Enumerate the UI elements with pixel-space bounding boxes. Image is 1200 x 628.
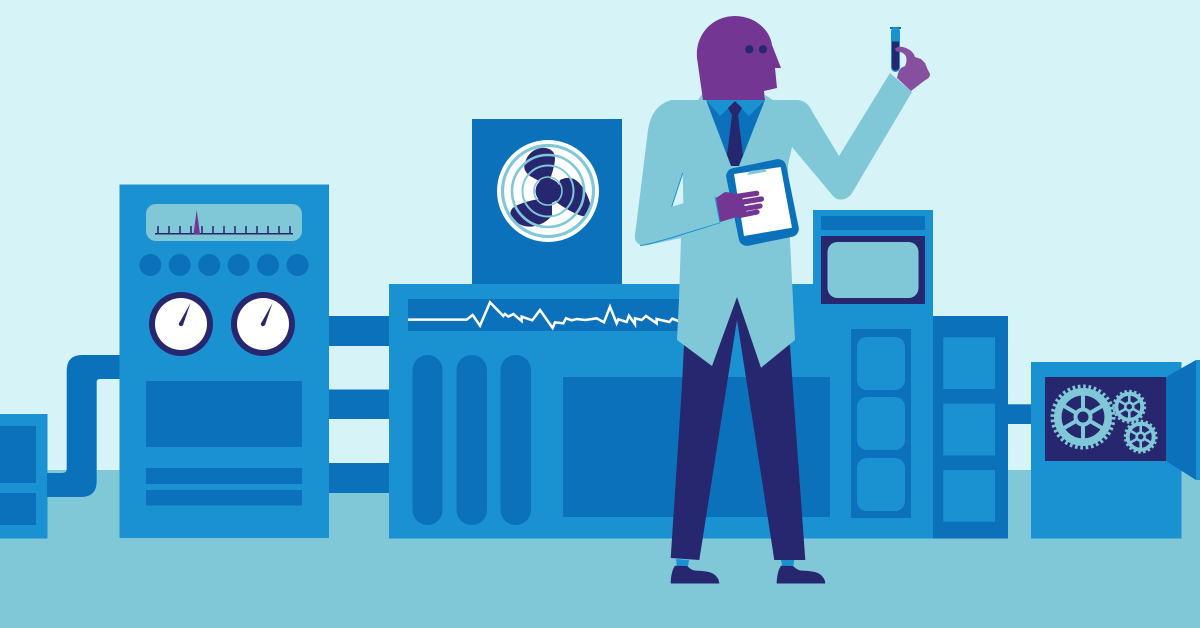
pipes: three connectors between panels (329, 316, 389, 493)
icon: large gear (1052, 386, 1114, 448)
shirt (706, 100, 765, 168)
figure: scientist (635, 16, 930, 584)
lab coat (635, 73, 912, 368)
eyes (745, 45, 767, 54)
large dark panel (563, 377, 830, 517)
cuff line (715, 197, 720, 223)
panel: monitor tower (813, 210, 933, 538)
right hand holding tube (895, 47, 930, 91)
legs: navy trousers (671, 297, 805, 560)
indicator lights (139, 254, 309, 276)
icon: fan (497, 140, 599, 242)
background: floor (0, 470, 1200, 628)
icon: medium gear (1114, 391, 1145, 422)
coat sleeve edge line (640, 173, 720, 246)
collar (706, 100, 765, 116)
machine: output funnel (1166, 360, 1200, 480)
meter display (146, 204, 302, 241)
cabinet lower panels (146, 381, 302, 506)
waveform display (408, 299, 683, 331)
panel: fan box (472, 119, 622, 285)
pipe: s-bend connector (47, 355, 120, 497)
icon: small gear (1125, 421, 1156, 452)
socks (676, 559, 794, 568)
tie (727, 101, 743, 168)
panel: right dark unit (933, 316, 1008, 538)
panel: main machine body (389, 284, 830, 538)
lower left sleeve fill (660, 196, 720, 240)
test tube (890, 27, 901, 72)
machine: left stub unit (0, 414, 48, 538)
head (697, 16, 781, 100)
gauge right (231, 292, 295, 356)
pipe: short connector (1008, 404, 1031, 424)
panel: control cabinet (120, 184, 329, 538)
monitor screen (821, 236, 925, 304)
shoes (671, 566, 825, 584)
tall pill slots (412, 355, 531, 525)
left hand with fingers (716, 192, 762, 222)
clipboard (725, 158, 800, 247)
gauge left (149, 292, 213, 356)
button column (851, 329, 911, 518)
panel: gear box (1031, 362, 1182, 538)
